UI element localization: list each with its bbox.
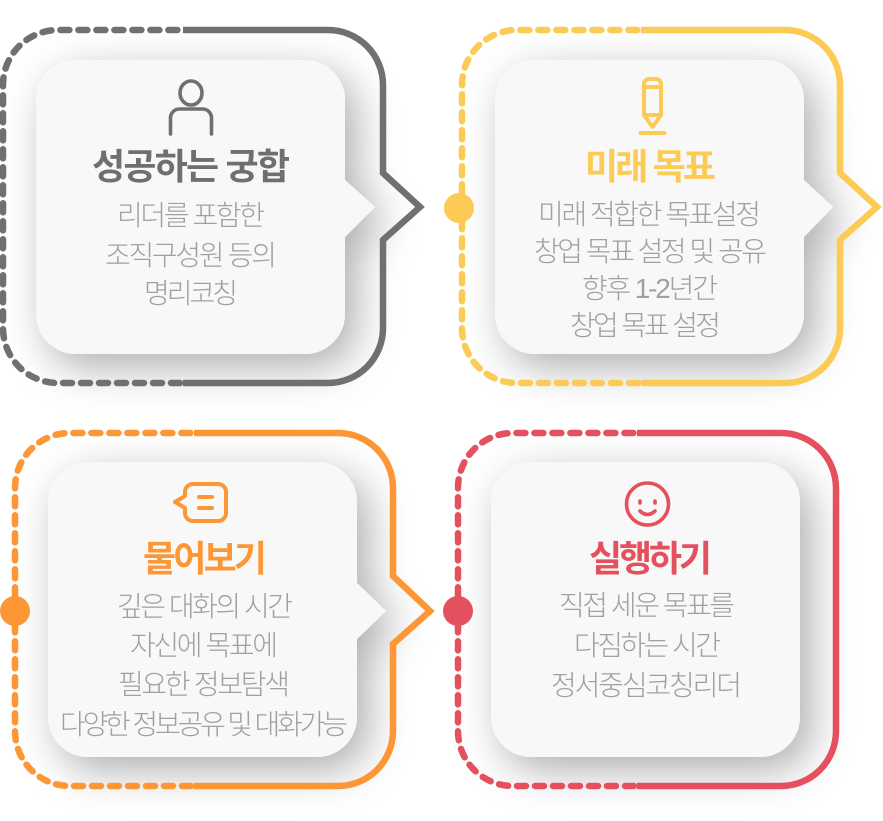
frame dashed side (458, 433, 634, 786)
text block: 정서중심코칭리더 (551, 670, 742, 701)
text block: 직접 세운 목표를 (559, 590, 735, 621)
card (495, 60, 833, 354)
frame solid side (641, 30, 877, 383)
icon: pencil (640, 79, 664, 133)
frame dashed side (3, 30, 180, 383)
panel: 미래 목표 (444, 30, 877, 383)
frame dashed side (462, 30, 638, 383)
text block: 창업 목표 설정 및 공유 (534, 236, 767, 267)
text block: 명리코칭 (144, 278, 238, 309)
icon: smiley (626, 483, 668, 525)
text block: 자신에 목표에 (130, 630, 278, 661)
text block: 리더를 포함한 (117, 200, 265, 231)
text block: 깊은 대화의 시간 (117, 591, 293, 622)
frame solid side (183, 30, 420, 383)
card (36, 60, 375, 354)
heading: 물어보기 (143, 538, 267, 579)
text block (60, 591, 348, 740)
text block: 조직구성원 등의 (105, 240, 277, 271)
panel: 성공하는 궁합 (3, 30, 420, 383)
text block (551, 590, 742, 701)
heading: 미래 목표 (585, 146, 716, 187)
text block: 다양한 정보공유 및 대화가능 (60, 709, 348, 740)
frame dashed side (15, 433, 191, 786)
connector dot (443, 596, 473, 626)
heading: 실행하기 (589, 538, 712, 579)
frame solid side (637, 433, 836, 786)
text block: 미래 적합한 목표설정 (538, 199, 761, 230)
icon: speech bubble (175, 484, 226, 521)
icon: person (170, 81, 212, 134)
connector dot (444, 193, 474, 223)
panel: 실행하기 (443, 433, 836, 786)
text block: 다짐하는 시간 (574, 630, 721, 661)
card (48, 462, 386, 757)
card (491, 462, 800, 757)
text block: 창업 목표 설정 (570, 310, 721, 341)
text block (534, 199, 767, 341)
frame solid side (194, 433, 430, 786)
heading: 성공하는 궁합 (92, 146, 290, 187)
text block (105, 200, 277, 309)
panel: 물어보기 (0, 433, 430, 786)
connector dot (0, 596, 30, 626)
text block: 필요한 정보탐색 (118, 669, 290, 700)
text block: 향후 1-2년간 (582, 273, 718, 304)
